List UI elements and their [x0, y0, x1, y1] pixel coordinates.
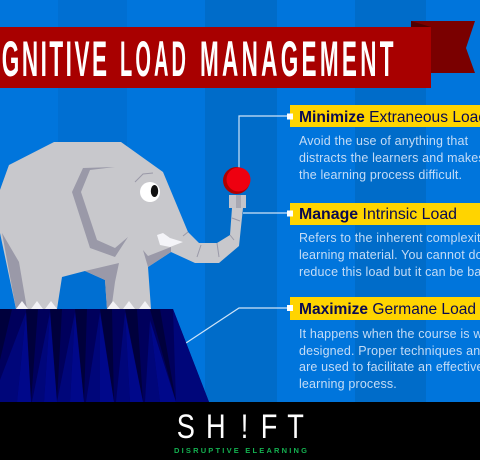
description: learning process. — [299, 377, 397, 391]
description: learning material. You cannot do — [299, 248, 480, 262]
elephant illustration — [0, 142, 243, 309]
logo wordmark: SH!FT — [177, 407, 304, 446]
logo tagline: DISRUPTIVE ELEARNING — [174, 446, 307, 455]
connector lines — [186, 116, 290, 343]
item: manage intrinsic load — [287, 203, 480, 279]
title: LOAD — [120, 33, 186, 88]
description: are used to facilitate an effective — [299, 360, 480, 374]
elephant back shading — [0, 165, 9, 210]
heading bar: Maximize Germane Load — [299, 301, 476, 318]
description — [299, 327, 480, 391]
description: distracts the learners and makes — [299, 151, 480, 165]
heading bar — [287, 297, 480, 320]
description — [299, 231, 480, 279]
toes — [16, 301, 151, 309]
eyebrow and trunk creases — [135, 173, 240, 257]
hind leg shading — [2, 233, 27, 309]
title ribbon — [0, 21, 475, 88]
heading bar: Manage Intrinsic Load — [299, 206, 457, 223]
description: the learning process difficult. — [299, 168, 462, 182]
description: Avoid the use of anything that — [299, 134, 469, 148]
shaded pleat halves — [17, 312, 176, 402]
bright pleats — [0, 309, 209, 402]
chin shading — [143, 247, 171, 267]
title: MANAGEMENT — [200, 32, 394, 88]
pleated stage — [0, 309, 209, 402]
item: minimize extraneous load — [287, 105, 480, 182]
ear — [72, 167, 128, 257]
elephant body and trunk — [0, 142, 243, 309]
footer — [0, 402, 480, 460]
front leg shading — [85, 263, 119, 309]
dark folds — [0, 309, 176, 402]
item: maximize germane load — [287, 297, 480, 391]
tusk — [157, 233, 183, 247]
title — [0, 32, 394, 88]
eye — [140, 182, 160, 202]
red ball on cup — [223, 167, 250, 208]
description — [299, 134, 480, 182]
heading bar — [287, 203, 480, 225]
